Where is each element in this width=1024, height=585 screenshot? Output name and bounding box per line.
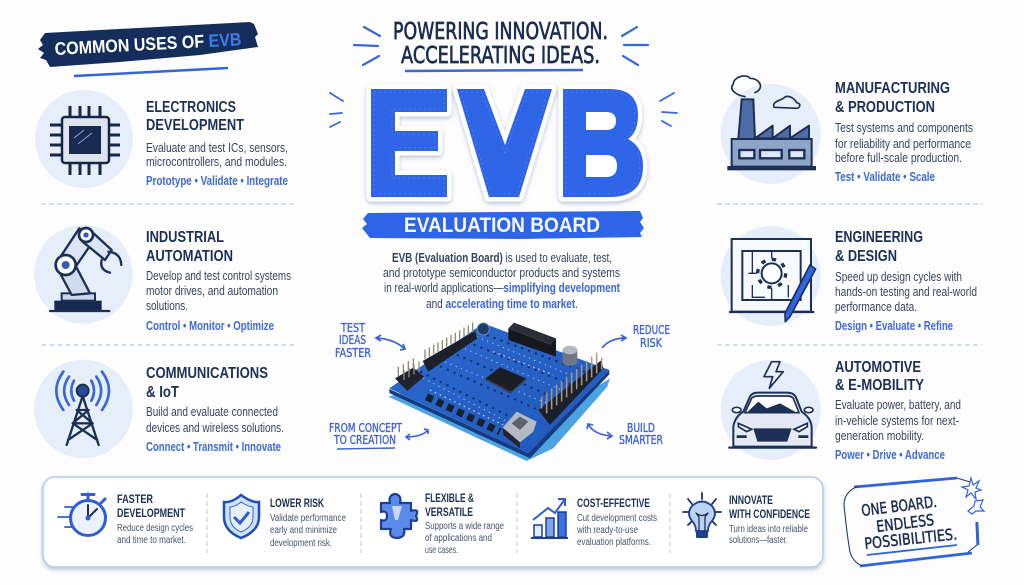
icon: factory bbox=[721, 76, 821, 184]
description: in-vehicle systems for next- bbox=[835, 414, 959, 428]
callout: build smarter: SMARTER bbox=[619, 433, 663, 447]
benefit: faster development bbox=[58, 494, 193, 546]
callout: reduce risk bbox=[602, 323, 670, 350]
tags: Prototype • Validate • Integrate bbox=[146, 174, 288, 188]
heading bbox=[835, 359, 924, 394]
benefit: flexible and versatile bbox=[381, 493, 504, 556]
icon: signal tower bbox=[34, 360, 133, 458]
callout: one board endless possibilities bbox=[844, 478, 984, 566]
icon: growth chart bbox=[531, 499, 568, 538]
text block: EVB description: EVB (Evaluation Board) is used to evaluate, test, bbox=[392, 251, 612, 265]
description: Develop and test control systems bbox=[146, 269, 291, 283]
description bbox=[835, 270, 977, 314]
text: FLEXIBLE & bbox=[425, 493, 474, 505]
text: VERSATILE bbox=[425, 507, 473, 519]
callout: one board endless possibilities: ENDLESS bbox=[875, 511, 935, 536]
heading: & IoT bbox=[146, 384, 179, 401]
benefit: lower risk bbox=[224, 495, 346, 549]
heading bbox=[835, 229, 923, 265]
description bbox=[835, 398, 961, 443]
heading: & DESIGN bbox=[835, 248, 897, 265]
top header bbox=[423, 331, 477, 372]
text: COST-EFFECTIVE bbox=[577, 498, 650, 510]
icon: stopwatch bbox=[58, 494, 106, 536]
description: Evaluate and test ICs, sensors, bbox=[146, 141, 288, 155]
panel: automotive and e-mobility bbox=[721, 359, 961, 462]
heading: COMMUNICATIONS bbox=[146, 365, 268, 382]
tagline: POWERING INNOVATION. bbox=[393, 19, 608, 45]
callout: one board endless possibilities: ONE BOARD. bbox=[860, 493, 938, 520]
callout: test ideas faster: IDEAS bbox=[339, 333, 366, 347]
benefit: cost-effective bbox=[531, 498, 657, 548]
heading bbox=[146, 99, 244, 134]
callout: one board endless possibilities: POSSIBILITIES. bbox=[864, 525, 958, 553]
arrow bbox=[602, 335, 626, 348]
text bbox=[270, 498, 346, 549]
text: evaluation platforms. bbox=[577, 537, 651, 548]
letter E bbox=[371, 89, 447, 197]
description: for reliability and performance bbox=[835, 137, 971, 151]
description: generation mobility. bbox=[835, 429, 924, 443]
description: devices and wireless solutions. bbox=[146, 421, 284, 435]
left header bbox=[395, 368, 424, 391]
description bbox=[146, 141, 288, 169]
text bbox=[729, 495, 810, 546]
heading: INDUSTRIAL bbox=[146, 229, 224, 246]
text: LOWER RISK bbox=[270, 498, 324, 510]
text: Reduce design cycles bbox=[117, 523, 193, 534]
chip bbox=[486, 367, 526, 392]
description: microcontrollers, and modules. bbox=[146, 155, 287, 169]
arrow bbox=[406, 429, 428, 440]
heading: DEVELOPMENT bbox=[146, 117, 244, 134]
callout: reduce risk: REDUCE bbox=[633, 323, 670, 337]
icon: light bulb bbox=[683, 493, 721, 538]
panel: industrial automation bbox=[34, 225, 291, 333]
arrow bbox=[376, 335, 405, 350]
relay bbox=[508, 323, 556, 344]
tags: Connect • Transmit • Innovate bbox=[146, 440, 281, 454]
text: Cut development costs bbox=[577, 513, 657, 524]
callout: test ideas faster: TEST bbox=[340, 321, 366, 335]
icon: shield bbox=[224, 495, 259, 538]
title: EVB bbox=[330, 89, 677, 197]
icon: robot arm bbox=[34, 225, 133, 324]
heading bbox=[835, 80, 950, 116]
callout: reduce risk: RISK bbox=[640, 336, 663, 350]
text: with ready-to-use bbox=[576, 525, 638, 536]
heading: AUTOMATION bbox=[146, 248, 233, 265]
text block: EVB description: in real-world applications—simplifying development bbox=[384, 281, 621, 295]
tags: Power • Drive • Advance bbox=[835, 448, 945, 462]
description: Test systems and components bbox=[835, 121, 973, 135]
benefit: innovate with confidence bbox=[683, 493, 810, 546]
capacitor bbox=[563, 350, 577, 366]
text: and time to market. bbox=[117, 535, 186, 546]
callout: test ideas faster: FASTER bbox=[335, 346, 371, 360]
tagline bbox=[354, 19, 648, 71]
description: Build and evaluate connected bbox=[146, 405, 278, 419]
heading: common uses of EVB: COMMON USES OF EVB bbox=[54, 29, 242, 59]
description: Evaluate power, battery, and bbox=[835, 398, 961, 412]
heading: common uses of EVB bbox=[38, 22, 258, 76]
callout: build smarter bbox=[587, 421, 663, 447]
description: solutions. bbox=[146, 299, 188, 313]
description: motor drives, and automation bbox=[146, 284, 278, 298]
description: before full-scale production. bbox=[835, 151, 962, 165]
description: hands-on testing and real-world bbox=[835, 285, 977, 299]
heading bbox=[146, 365, 268, 401]
text: WITH CONFIDENCE bbox=[729, 509, 810, 521]
banner: evaluation board: EVALUATION BOARD bbox=[404, 214, 600, 237]
USB connector bbox=[503, 412, 537, 442]
heading: MANUFACTURING bbox=[835, 80, 950, 97]
text: solutions—faster. bbox=[729, 535, 788, 546]
tags: Test • Validate • Scale bbox=[835, 170, 935, 184]
callout: from concept to creation bbox=[329, 421, 428, 449]
text block: EVB description: and prototype semiconductor products and systems bbox=[383, 266, 620, 280]
callout: build smarter: BUILD bbox=[627, 421, 655, 435]
panel: engineering and design bbox=[721, 226, 977, 333]
text bbox=[117, 494, 193, 546]
panel: manufacturing and production bbox=[721, 76, 973, 184]
callout: from concept to creation: FROM CONCEPT bbox=[329, 421, 403, 435]
text: development risk. bbox=[270, 538, 332, 549]
banner: evaluation board bbox=[362, 211, 644, 239]
callout: from concept to creation: TO CREATION bbox=[333, 433, 396, 447]
text block: EVB description bbox=[383, 251, 621, 311]
description: Speed up design cycles with bbox=[835, 270, 962, 284]
text: Turn ideas into reliable bbox=[729, 524, 808, 535]
icon: car and lightning bolt bbox=[721, 360, 821, 460]
description bbox=[146, 405, 284, 435]
text block: EVB description: and accelerating time to market. bbox=[426, 297, 578, 311]
panel: benefits bar bbox=[43, 477, 823, 567]
tags: Design • Evaluate • Refine bbox=[835, 319, 953, 333]
text: early and minimize bbox=[270, 525, 337, 536]
heading bbox=[146, 229, 233, 265]
heading: ENGINEERING bbox=[835, 229, 923, 246]
panel: electronics development bbox=[35, 90, 288, 188]
arrow bbox=[587, 424, 612, 439]
text: INNOVATE bbox=[729, 495, 773, 507]
heading: ELECTRONICS bbox=[146, 99, 236, 116]
heading: & PRODUCTION bbox=[835, 99, 935, 116]
description bbox=[146, 269, 291, 313]
icon: blueprint and pencil bbox=[721, 226, 821, 326]
text: use cases. bbox=[425, 545, 458, 556]
tags: Control • Monitor • Optimize bbox=[146, 319, 274, 333]
heading: & E-MOBILITY bbox=[835, 377, 924, 394]
board traces and parts bbox=[420, 335, 593, 432]
tagline: ACCELERATING IDEAS. bbox=[401, 43, 600, 69]
letter V bbox=[457, 89, 552, 197]
text: FASTER bbox=[117, 494, 154, 506]
text: of applications and bbox=[425, 533, 492, 544]
description bbox=[835, 121, 973, 165]
text: Validate performance bbox=[270, 513, 346, 524]
text: DEVELOPMENT bbox=[117, 508, 185, 520]
letter B bbox=[563, 89, 643, 197]
icon: puzzle piece bbox=[381, 494, 417, 538]
text bbox=[425, 493, 504, 556]
description: performance data. bbox=[835, 300, 917, 314]
heading: AUTOMOTIVE bbox=[835, 359, 921, 376]
callout: test ideas faster bbox=[335, 321, 405, 360]
text bbox=[576, 498, 657, 548]
right header bbox=[538, 360, 603, 425]
icon: microchip bbox=[35, 90, 133, 188]
panel: communications and IoT bbox=[34, 360, 284, 458]
illustration: evaluation board bbox=[388, 322, 610, 461]
text: Supports a wide range bbox=[425, 521, 504, 532]
